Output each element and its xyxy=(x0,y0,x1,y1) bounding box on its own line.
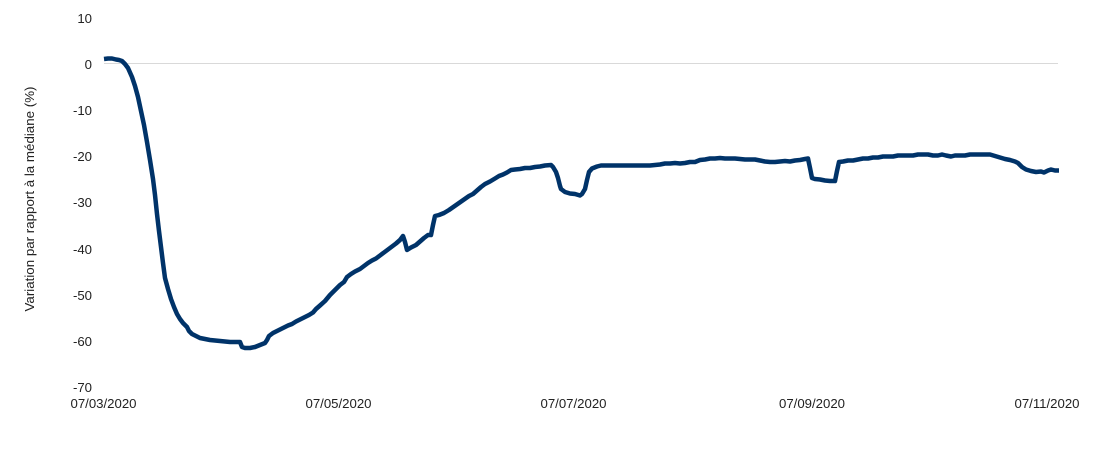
y axis labels xyxy=(73,11,92,395)
y axis labels: -50 xyxy=(73,288,92,303)
y axis labels: -40 xyxy=(73,242,92,257)
y axis title: Variation par rapport à la médiane (%) xyxy=(22,87,37,311)
x axis labels: 07/11/2020 xyxy=(1014,396,1080,411)
x axis labels: 07/03/2020 xyxy=(70,396,137,411)
data series line xyxy=(104,58,1059,348)
y axis labels: -70 xyxy=(73,380,92,395)
x axis labels: 07/05/2020 xyxy=(305,396,372,411)
y axis labels: -60 xyxy=(73,334,92,349)
y axis labels: 0 xyxy=(85,57,92,72)
y axis labels: -10 xyxy=(73,103,92,118)
zero baseline xyxy=(104,62,1058,64)
y axis labels: -30 xyxy=(73,195,92,210)
x axis labels: 07/09/2020 xyxy=(779,396,845,411)
x axis labels xyxy=(70,396,1080,411)
y axis labels: 10 xyxy=(77,11,92,26)
y axis labels: -20 xyxy=(73,149,92,164)
x axis labels: 07/07/2020 xyxy=(540,396,607,411)
